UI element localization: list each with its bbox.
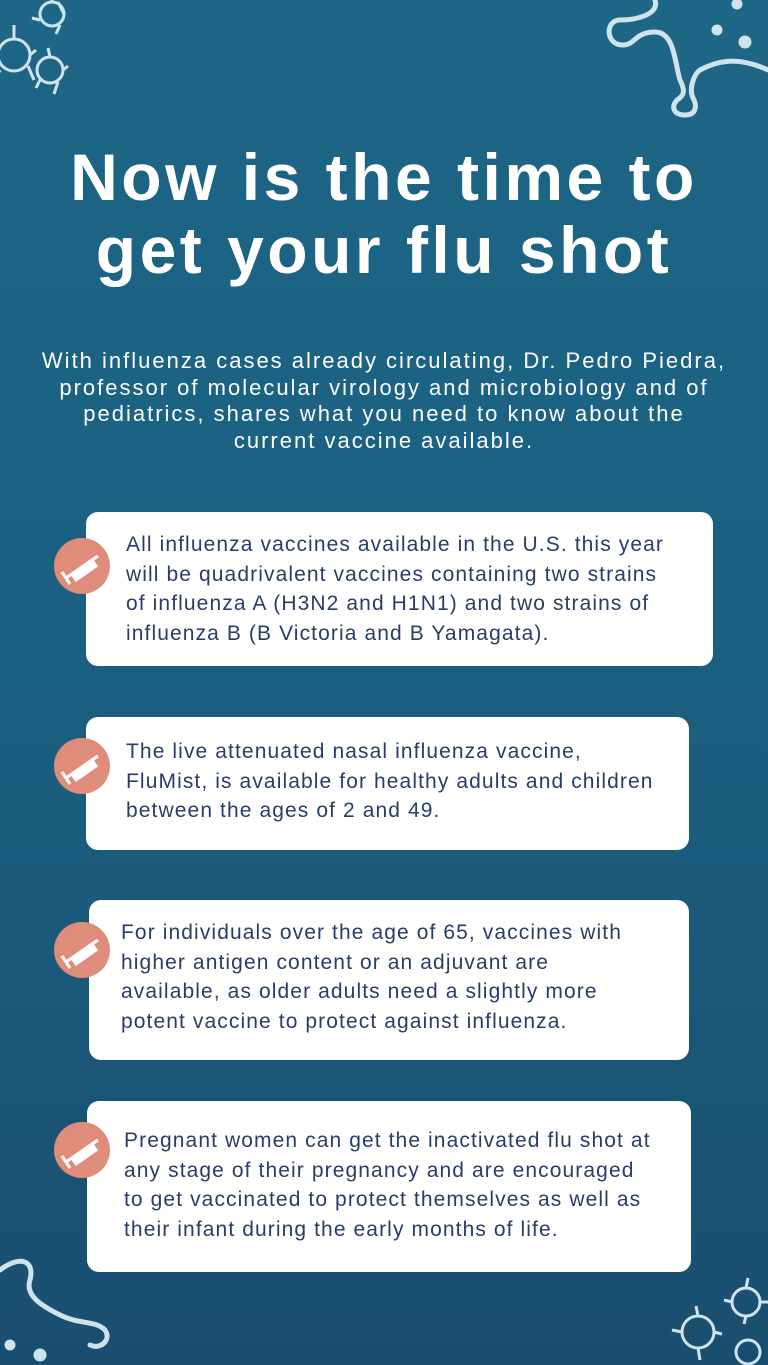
intro text xyxy=(42,348,726,452)
panel: card 1: will be quadrivalent vaccines containing two strains xyxy=(126,562,657,586)
panel: card 4 xyxy=(87,1101,691,1272)
panel: card 4: their infant during the early months of life. xyxy=(124,1218,559,1240)
panel: card 3: available, as older adults need a slightly more xyxy=(121,980,598,1003)
decoration: virus bottom-left xyxy=(0,1258,110,1362)
panel: card 4: to get vaccinated to protect themselves as well as xyxy=(124,1188,641,1211)
panel: card 3: higher antigen content or an adjuvant are xyxy=(121,950,549,974)
panel: card 1: of influenza A (H3N2 and H1N1) and two strains of xyxy=(126,592,649,615)
intro text: current vaccine available. xyxy=(234,428,534,452)
intro text: pediatrics, shares what you need to know about the xyxy=(83,401,685,426)
decoration: virus top-right xyxy=(606,0,768,118)
title: get your flu shot xyxy=(96,213,672,287)
title: Now is the time to xyxy=(70,140,698,214)
panel: card 2: between the ages of 2 and 49. xyxy=(126,799,440,822)
intro text: professor of molecular virology and microbiology and of xyxy=(59,374,709,400)
panel: card 1 xyxy=(86,512,713,666)
title xyxy=(70,140,698,287)
panel: card 3: potent vaccine to protect against influenza. xyxy=(121,1010,568,1032)
icon: syringe 1 xyxy=(54,538,110,594)
icon: syringe 2 xyxy=(54,738,110,794)
panel: card 2: The live attenuated nasal influenza vaccine, xyxy=(126,740,582,763)
panel: card 2 xyxy=(86,717,689,850)
panel: card 3 xyxy=(89,900,689,1060)
icon: syringe 4 xyxy=(54,1122,110,1178)
panel: card 2: FluMist, is available for healthy adults and children xyxy=(126,770,654,792)
panel: card 4: any stage of their pregnancy and are encouraged xyxy=(124,1158,635,1182)
intro text: With influenza cases already circulating, Dr. Pedro Piedra, xyxy=(42,348,726,373)
panel: card 1: influenza B (B Victoria and B Yamagata). xyxy=(126,622,549,644)
icon: syringe 3 xyxy=(54,922,110,978)
panel: card 1: All influenza vaccines available in the U.S. this year xyxy=(126,533,664,556)
decoration: viruses top-left xyxy=(0,0,69,94)
panel: card 3: For individuals over the age of 65, vaccines with xyxy=(121,921,622,944)
decoration: viruses bottom-right xyxy=(672,1278,768,1365)
panel: card 4: Pregnant women can get the inactivated flu shot at xyxy=(124,1129,651,1152)
